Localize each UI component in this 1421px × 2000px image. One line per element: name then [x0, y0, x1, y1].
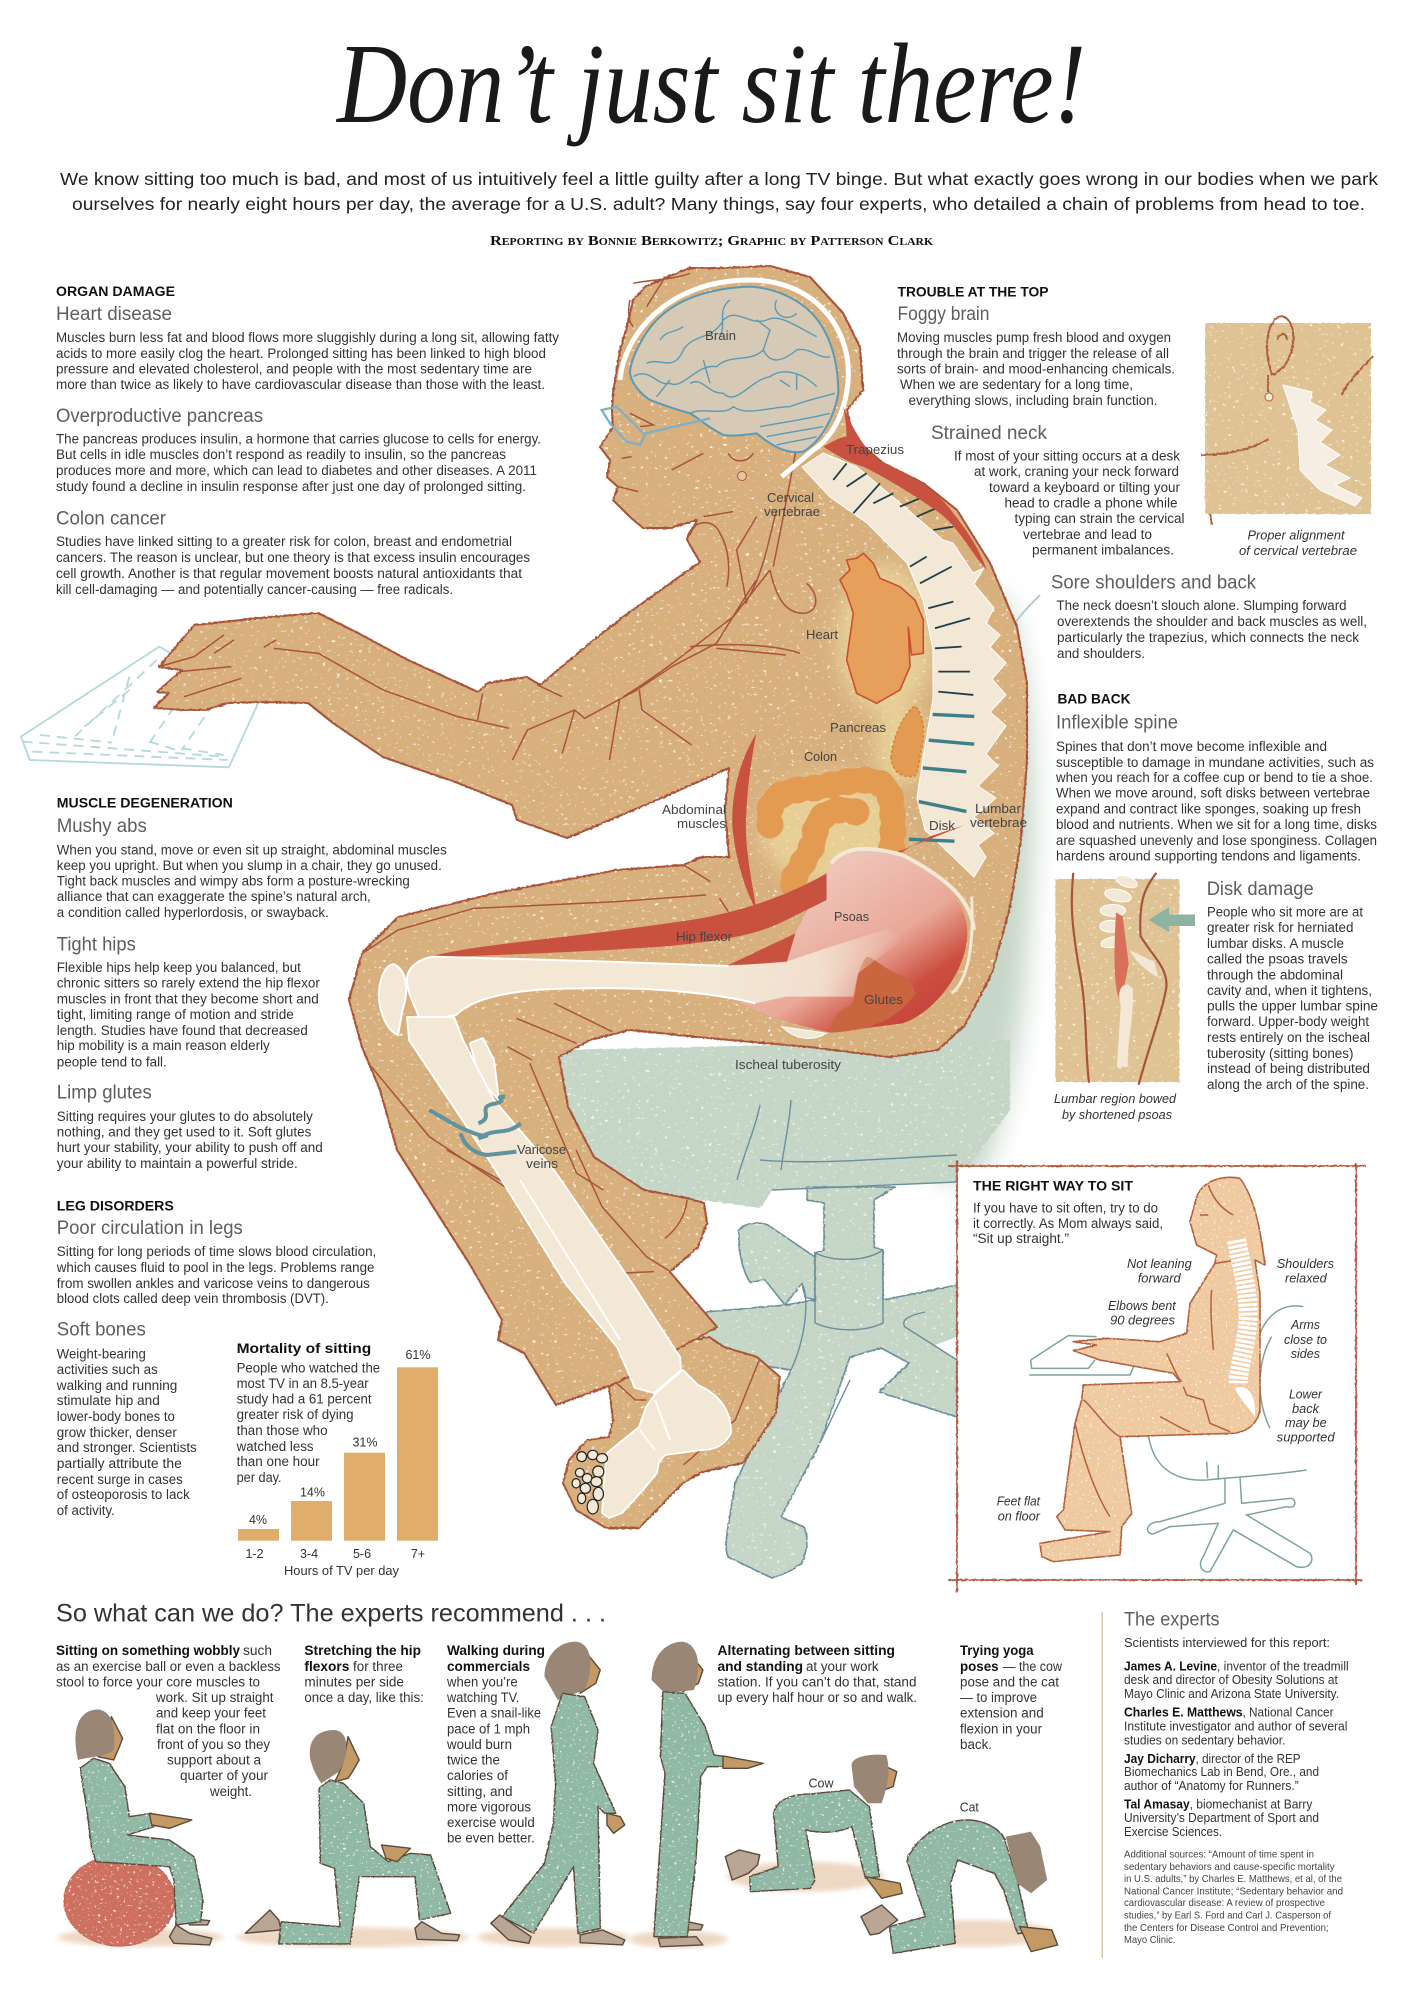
panel: sore shoulders: particularly the trapezius, which connects the neck — [1057, 630, 1359, 645]
pelvis and glutes — [379, 825, 974, 1038]
panel: bad back: blood and nutrients. When we sit for a long time, disks — [1056, 817, 1377, 832]
panel: organ damage: kill cell-damaging — and potentially cancer-causing — free radicals. — [56, 582, 453, 597]
text: stretching the hip flexors: for three — [353, 1659, 403, 1674]
right-way annotations: Elbows bent — [1108, 1298, 1177, 1313]
figure: seated body — [154, 266, 1027, 1528]
panel: trouble at the top: Moving muscles pump fresh blood and oxygen — [897, 330, 1171, 345]
right-way annotations: forward — [1138, 1271, 1181, 1286]
illustration labels: veins — [526, 1157, 558, 1171]
text: walking during commercials: Walking during — [447, 1643, 545, 1658]
panel: leg disorders: from swollen ankles and varicose veins to dangerous — [57, 1276, 370, 1291]
panel: organ damage: cancers. The reason is unclear, but one theory is that excess insulin encourages — [56, 550, 530, 565]
illustration labels — [517, 329, 1027, 1171]
panel: sore shoulders: The neck doesn’t slouch alone. Slumping forward — [1056, 598, 1346, 613]
panel: the experts: Mayo Clinic and Arizona State University. — [1124, 1687, 1339, 1701]
panel: the experts: Institute investigator and author of several — [1124, 1720, 1347, 1734]
text: sitting on something wobbly: flat on the floor in — [156, 1722, 260, 1737]
right-way annotations: back — [1292, 1401, 1320, 1416]
bar chart: mortality of sitting: than those who — [237, 1423, 328, 1438]
right-way annotations: sides — [1291, 1346, 1320, 1361]
text: stretching the hip flexors — [304, 1643, 424, 1705]
illustration labels: Lumbar — [975, 802, 1021, 816]
additional sources: cardiovascular disease: A review of prospective — [1124, 1897, 1325, 1909]
additional sources: Additional sources: “Amount of time spent in — [1124, 1849, 1314, 1861]
panel: the right way to sit — [948, 1160, 1366, 1593]
bar chart: mortality of sitting: 61% — [405, 1348, 431, 1362]
panel: muscle degeneration: tight, limiting range of motion and stride — [57, 1007, 294, 1022]
text: walking during commercials: sitting, and — [447, 1784, 513, 1799]
panel: leg disorders: lower-body bones to — [57, 1409, 175, 1424]
panel: the right way to sit: If you have to sit often, try to do — [973, 1201, 1158, 1216]
bar chart: mortality of sitting: most TV in an 8.5-year — [237, 1376, 369, 1391]
bar chart: mortality of sitting: greater risk of dying — [237, 1407, 354, 1422]
panel: trouble at the top: at work, craning your neck forward — [974, 464, 1179, 479]
panel: trouble at the top — [897, 284, 1184, 558]
neck inset caption — [1239, 528, 1357, 558]
panel: disk damage: greater risk for herniated — [1207, 920, 1354, 935]
keyboard — [21, 647, 259, 767]
shin and foot bones — [407, 1017, 731, 1518]
text: trying yoga poses: — to improve — [960, 1690, 1037, 1705]
panel: disk damage: pulls the upper lumbar spine — [1207, 999, 1378, 1014]
panel: bad back: susceptible to damage in mundane activities, such as — [1056, 755, 1374, 770]
panel: leg disorders: recent surge in cases — [57, 1472, 183, 1487]
bar chart: mortality of sitting: Mortality of sitting — [237, 1341, 371, 1356]
panel: muscle degeneration: your ability to maintain a powerful stride. — [57, 1156, 298, 1171]
panel: the right way to sit: “Sit up straight.” — [973, 1231, 1069, 1246]
panel: sore shoulders — [1051, 572, 1367, 661]
disk inset caption — [1054, 1091, 1177, 1122]
text: sitting on something wobbly: stool to force your core muscles to — [56, 1675, 260, 1690]
panel: muscle degeneration: Limp glutes — [57, 1083, 152, 1104]
panel: trouble at the top: vertebrae and lead to — [1023, 527, 1152, 542]
panel: organ damage: Muscles burn less fat and blood flows more sluggishly during a long sit, allowing fatty — [56, 330, 559, 345]
panel: bad back: Inflexible spine — [1056, 713, 1178, 734]
text: sitting on something wobbly: such — [243, 1643, 272, 1658]
text: sitting on something wobbly — [56, 1643, 281, 1799]
right-way chair — [1029, 1306, 1312, 1572]
panel: organ damage: Overproductive pancreas — [56, 406, 263, 427]
panel: the experts: Exercise Sciences. — [1124, 1825, 1222, 1839]
illustration labels: muscles — [677, 817, 726, 831]
right-way annotations: close to — [1284, 1332, 1327, 1347]
panel: bad back: Spines that don’t move become inflexible and — [1056, 739, 1327, 754]
panel: leg disorders: Soft bones — [57, 1320, 146, 1341]
panel: muscle degeneration: hurt your stability, your ability to push off and — [57, 1140, 323, 1155]
neck inset caption: Proper alignment — [1248, 528, 1346, 542]
text: sitting on something wobbly: weight. — [209, 1784, 252, 1799]
panel: leg disorders: activities such as — [57, 1362, 158, 1377]
panel: disk damage: Disk damage — [1207, 879, 1314, 900]
colon — [769, 780, 893, 885]
disk inset caption: Lumbar region bowed — [1054, 1091, 1177, 1106]
illustration labels: Hip flexor — [676, 930, 732, 944]
panel: leg disorders: Poor circulation in legs — [57, 1218, 243, 1239]
text: alternating sitting and standing: and standing — [718, 1659, 803, 1674]
panel: muscle degeneration: Mushy abs — [57, 816, 147, 837]
panel: organ damage: acids to more easily clog the heart. Prolonged sitting has been linked to high blood — [56, 346, 546, 361]
femur — [407, 928, 902, 1022]
bar chart: mortality of sitting: 1-2 — [245, 1547, 264, 1561]
panel: trouble at the top: permanent imbalances. — [1032, 542, 1174, 558]
earring — [738, 472, 746, 480]
right-way annotations: Feet flat — [997, 1494, 1041, 1509]
bar chart: mortality of sitting: watched less — [236, 1439, 314, 1454]
illustration labels: Glutes — [864, 993, 903, 1007]
arrow — [1148, 907, 1195, 932]
panel: disk damage — [1207, 879, 1378, 1092]
additional sources: Mayo Clinic. — [1124, 1934, 1176, 1946]
bar chart: mortality of sitting: 31% — [352, 1436, 378, 1450]
text: walking during commercials: twice the — [447, 1753, 500, 1768]
hip flexor — [429, 873, 827, 965]
panel: trouble at the top: Foggy brain — [898, 304, 990, 325]
additional sources: National Cancer Institute; “Sedentary behavior and — [1124, 1886, 1343, 1898]
panel: bad back — [1055, 692, 1377, 864]
text: trying yoga poses: extension and — [960, 1706, 1044, 1721]
figure stretching — [245, 1730, 460, 1944]
bar chart: mortality of sitting: than one hour — [237, 1454, 320, 1469]
panel: muscle degeneration: length. Studies have found that decreased — [57, 1023, 308, 1038]
right-way annotations: supported — [1277, 1430, 1335, 1445]
bar chart: mortality of sitting: 4% — [249, 1513, 267, 1527]
text: trying yoga poses: — the cow — [1003, 1659, 1062, 1674]
varicose veins — [429, 1097, 521, 1155]
right-way figure — [1040, 1177, 1265, 1562]
panel: muscle degeneration: nothing, and they get used to it. Soft glutes — [57, 1125, 312, 1140]
panel: leg disorders: and stronger. Scientists — [57, 1440, 197, 1455]
illustration labels: Varicose — [517, 1143, 566, 1157]
panel: the experts: author of “Anatomy for Runners.” — [1124, 1779, 1299, 1793]
panel: the experts — [1124, 1610, 1349, 1839]
panel: disk damage: tuberosity (sitting bones) — [1207, 1046, 1354, 1061]
panel: trouble at the top: everything slows, including brain function. — [908, 393, 1158, 408]
cow label: Cow — [808, 1777, 834, 1791]
illustration labels: Psoas — [834, 910, 869, 924]
text: sitting on something wobbly: Sitting on something wobbly — [56, 1643, 240, 1658]
illustration labels: Trapezius — [846, 443, 904, 457]
exercise figures: ball, stretch, walk, stand — [58, 1642, 763, 1948]
panel: muscle degeneration: keep you upright. But when you slump in a chair, they go unused. — [57, 858, 442, 873]
text: walking during commercials: would burn — [446, 1737, 512, 1752]
panel: trouble at the top: toward a keyboard or tilting your — [989, 480, 1180, 495]
text: sitting on something wobbly: as an exercise ball or even a backless — [56, 1659, 281, 1674]
organ glow — [760, 565, 933, 885]
bar chart: mortality of sitting: Hours of TV per day — [284, 1564, 400, 1578]
spine — [802, 453, 1006, 877]
panel: disk damage: lumbar disks. A muscle — [1207, 936, 1344, 951]
illustration labels: Ischeal tuberosity — [735, 1058, 842, 1072]
exercise figures: cow and cat — [725, 1755, 1058, 1953]
text: walking during commercials: pace of 1 mph — [447, 1722, 530, 1737]
text: walking during commercials: commercials — [447, 1659, 530, 1674]
panel: leg disorders: grow thicker, denser — [57, 1425, 177, 1440]
panel: muscle degeneration: hip mobility is a main reason elderly — [57, 1038, 270, 1053]
text: walking during commercials: more vigorous — [447, 1800, 531, 1815]
illustration labels: Brain — [705, 329, 736, 343]
toes — [572, 1450, 608, 1514]
panel: trouble at the top: sorts of brain- and mood-enhancing chemicals. — [897, 362, 1175, 376]
panel: the right way to sit: it correctly. As Mom always said, — [973, 1216, 1163, 1231]
byline: Reporting by Bonnie Berkowitz; Graphic by Patterson Clark — [490, 234, 933, 249]
panel: disk damage: called the psoas travels — [1207, 952, 1348, 967]
panel: organ damage: ORGAN DAMAGE — [56, 284, 175, 299]
kneecap — [379, 964, 406, 1035]
text: sitting on something wobbly: support about a — [167, 1753, 261, 1768]
panel: the experts: , director of the REP — [1196, 1752, 1301, 1766]
panel: muscle degeneration — [57, 796, 447, 1171]
panel: muscle degeneration: Tight hips — [57, 934, 136, 956]
right-way annotations: 90 degrees — [1110, 1313, 1175, 1328]
bar chart: mortality of sitting: study had a 61 percent — [237, 1392, 372, 1407]
figure standing — [652, 1642, 763, 1947]
text: alternating sitting and standing: at your work — [806, 1659, 879, 1674]
right-way annotations — [997, 1256, 1335, 1524]
panel: muscle degeneration: MUSCLE DEGENERATION — [57, 796, 233, 811]
neck inset caption: of cervical vertebrae — [1239, 543, 1357, 558]
panel: sore shoulders: Sore shoulders and back — [1051, 572, 1256, 594]
panel: muscle degeneration: When you stand, move or even sit up straight, abdominal muscles — [57, 842, 447, 858]
panel: organ damage: The pancreas produces insulin, a hormone that carries glucose to cells for energy. — [56, 432, 541, 446]
text: walking during commercials: calories of — [447, 1768, 508, 1783]
panel: leg disorders: blood clots called deep vein thrombosis (DVT). — [57, 1291, 329, 1306]
pancreas — [891, 706, 923, 777]
panel: leg disorders: partially attribute the — [57, 1456, 182, 1471]
illustration labels: Pancreas — [830, 721, 886, 735]
panel: the experts: James A. Levine — [1124, 1660, 1217, 1674]
illustration labels: Colon — [804, 750, 837, 764]
additional sources: sedentary behaviors and cause-specific mortality — [1124, 1861, 1335, 1873]
panel: muscle degeneration: people tend to fall. — [57, 1054, 167, 1070]
text: trying yoga poses: Trying yoga — [960, 1643, 1034, 1658]
figure on ball — [75, 1709, 212, 1945]
panel: disk damage: through the abdominal — [1207, 967, 1343, 982]
panel: organ damage: Colon cancer — [56, 508, 167, 530]
panel: bad back: BAD BACK — [1058, 692, 1131, 706]
panel: disk damage: rests entirely on the ischeal — [1207, 1030, 1370, 1045]
panel: trouble at the top: through the brain and trigger the release of all — [897, 346, 1169, 361]
intro text — [60, 169, 1378, 214]
panel: disk damage: cavity and, when it tightens, — [1207, 983, 1372, 998]
text: walking during commercials: be even better. — [447, 1831, 535, 1846]
text: stretching the hip flexors: Stretching the hip — [304, 1643, 421, 1658]
bar chart: mortality of sitting: 5-6 — [353, 1547, 371, 1561]
panel: the experts: Jay Dicharry — [1124, 1752, 1196, 1766]
text: trying yoga poses: back. — [960, 1737, 992, 1752]
panel: leg disorders: stimulate hip and — [57, 1393, 160, 1408]
right-way annotations: Shoulders — [1277, 1256, 1334, 1271]
trapezius muscle — [823, 407, 987, 570]
additional sources: in U.S. adults,” by Charles E. Matthews, et al, of the — [1124, 1873, 1342, 1885]
panel: the experts: Biomechanics Lab in Bend, Ore., and — [1124, 1765, 1319, 1779]
illustration labels: Heart — [806, 628, 839, 642]
figure walking — [491, 1642, 625, 1945]
panel: trouble at the top: If most of your sitting occurs at a desk — [954, 448, 1180, 464]
panel: disk damage: along the arch of the spine. — [1207, 1077, 1369, 1092]
glasses — [602, 407, 710, 445]
text: walking during commercials: Even a snail-like — [447, 1706, 541, 1721]
panel: bad back: expand and contract like sponges, soaking up fresh — [1056, 802, 1361, 816]
clothing and skin lines — [159, 273, 816, 1465]
panel: the experts: , National Cancer — [1242, 1706, 1334, 1720]
panel: leg disorders: walking and running — [56, 1378, 177, 1393]
panel: leg disorders: Sitting for long periods of time slows blood circulation, — [57, 1244, 376, 1259]
bar chart: mortality of sitting: 14% — [300, 1486, 325, 1500]
panel: organ damage: pressure and elevated cholesterol, and people with the most sedentary time are — [56, 362, 532, 376]
panel: the experts: Scientists interviewed for this report: — [1124, 1636, 1330, 1650]
text: walking during commercials — [446, 1643, 545, 1846]
panel: the experts: University’s Department of Sport and — [1124, 1811, 1319, 1825]
panel: bad back: When we move around, soft disks between vertebrae — [1056, 786, 1370, 801]
text: stretching the hip flexors: flexors — [304, 1659, 349, 1674]
illustration labels: vertebrae — [970, 816, 1027, 830]
bar chart: mortality of sitting — [236, 1341, 438, 1578]
panel: trouble at the top: TROUBLE AT THE TOP — [898, 284, 1048, 300]
disk inset caption: by shortened psoas — [1062, 1107, 1172, 1122]
panel: organ damage: study found a decline in insulin response after just one day of prolonged sitting. — [56, 479, 526, 494]
panel: trouble at the top: head to cradle a phone while — [1004, 496, 1178, 510]
text: walking during commercials: exercise would — [447, 1815, 535, 1830]
panel: leg disorders: Weight-bearing — [57, 1347, 146, 1362]
panel: leg disorders: which causes fluid to pool in the legs. Problems range — [56, 1260, 374, 1275]
panel: the experts: The experts — [1124, 1610, 1220, 1631]
additional sources: studies,” by Earl S. Ford and Carl J. Casperson of — [1124, 1910, 1331, 1922]
panel: the experts: Charles E. Matthews — [1124, 1706, 1243, 1720]
text: alternating sitting and standing: station. If you can’t do that, stand — [718, 1675, 916, 1690]
text: sitting on something wobbly: front of you so they — [157, 1737, 270, 1752]
cow pose — [725, 1755, 902, 1898]
text: trying yoga poses: pose and the cat — [960, 1675, 1059, 1690]
additional sources — [1124, 1849, 1343, 1946]
panel: muscle degeneration: Sitting requires your glutes to do absolutely — [57, 1109, 313, 1124]
panel: bad back: when you reach for a coffee cup or bend to tie a shoe. — [1055, 770, 1373, 785]
cat label: Cat — [960, 1801, 979, 1815]
text: sitting on something wobbly: and keep your feet — [156, 1706, 266, 1721]
illustration labels: Abdominal — [662, 803, 726, 817]
panel: muscle degeneration: Flexible hips help keep you balanced, but — [57, 960, 301, 975]
panel: organ damage: Studies have linked sitting to a greater risk for colon, breast and endometrial — [56, 534, 512, 549]
panel: muscle degeneration: Tight back muscles and wimpy abs form a posture-wrecking — [57, 874, 410, 889]
right-way annotations: Arms — [1290, 1317, 1320, 1332]
bar chart: mortality of sitting: 7+ — [411, 1547, 425, 1561]
abdominal muscle — [732, 733, 756, 910]
panel: organ damage: produces more and more, which can lead to diabetes and other diseases. A 2011 — [56, 463, 537, 478]
panel: the experts: , biomechanist at Barry — [1190, 1798, 1313, 1812]
text: walking during commercials: watching TV. — [446, 1690, 520, 1705]
text: stretching the hip flexors: minutes per side — [304, 1675, 404, 1690]
panel: organ damage: But cells in idle muscles don’t respond as readily to insulin, so the pancreas — [56, 447, 506, 462]
panel: disk inset — [1055, 873, 1179, 1085]
panel: leg disorders: of activity. — [57, 1503, 115, 1518]
illustration labels: Cervical — [767, 491, 814, 505]
panel: trouble at the top: typing can strain the cervical — [1014, 511, 1184, 526]
panel: sore shoulders: overextends the shoulder and back muscles as well, — [1057, 614, 1367, 629]
panel: sore shoulders: and shoulders. — [1057, 646, 1145, 661]
illustration labels: Disk — [929, 819, 956, 833]
right-way annotations: on floor — [998, 1509, 1041, 1524]
title: Don’t just sit there! — [335, 20, 1086, 147]
panel: disk damage: instead of being distributed — [1207, 1061, 1370, 1076]
intro text: We know sitting too much is bad, and most of us intuitively feel a little guilty after a long TV binge. But what exactly goes wrong in our bodies when we park — [60, 169, 1378, 189]
brain — [620, 280, 848, 477]
intro text: ourselves for nearly eight hours per day, the average for a U.S. adult? Many things, say four experts, who detailed a chain of problems from head to toe. — [72, 194, 1365, 214]
text: stretching the hip flexors: once a day, like this: — [304, 1690, 424, 1705]
heading: recommendations: So what can we do? The experts recommend . . . — [56, 1600, 606, 1628]
text: sitting on something wobbly: quarter of your — [180, 1768, 269, 1783]
text: alternating sitting and standing: up every half hour or so and walk. — [718, 1690, 917, 1705]
panel: organ damage: cell growth. Another is that regular movement boosts natural antioxidants that — [56, 566, 522, 581]
right-way annotations: may be — [1285, 1415, 1327, 1430]
bar chart: mortality of sitting: per day. — [237, 1470, 282, 1485]
panel: the experts: studies on sedentary behavior. — [1124, 1734, 1285, 1748]
panel: the right way to sit: THE RIGHT WAY TO SIT — [973, 1179, 1134, 1194]
text: trying yoga poses — [960, 1643, 1062, 1752]
panel: muscle degeneration: alliance that can exaggerate the spine’s natural arch, — [57, 889, 371, 904]
right-way annotations: relaxed — [1285, 1271, 1327, 1286]
panel: the experts: , inventor of the treadmill — [1217, 1660, 1349, 1674]
text: sitting on something wobbly: work. Sit up straight — [155, 1690, 274, 1705]
panel: leg disorders: of osteoporosis to lack — [57, 1487, 190, 1502]
panel: muscle degeneration: chronic sitters so rarely extend the hip flexor — [57, 976, 320, 990]
panel: the experts: Tal Amasay — [1124, 1798, 1190, 1812]
panel: trouble at the top: Strained neck — [931, 423, 1047, 444]
panel: disk damage: forward. Upper-body weight — [1207, 1014, 1369, 1029]
right-way annotations: Lower — [1289, 1387, 1323, 1402]
panel: bad back: are squashed unevenly and lose sponginess. Collagen — [1056, 833, 1377, 848]
divider — [1102, 1612, 1103, 1958]
additional sources: the Centers for Disease Control and Prevention; — [1124, 1922, 1329, 1934]
text: trying yoga poses: flexion in your — [960, 1722, 1042, 1737]
text: walking during commercials: when you’re — [446, 1675, 518, 1690]
text: trying yoga poses: poses — [960, 1659, 999, 1674]
bar chart: mortality of sitting: People who watched the — [237, 1361, 380, 1376]
text: alternating sitting and standing — [718, 1643, 917, 1705]
panel: muscle degeneration: muscles in front that they become short and — [57, 992, 319, 1007]
exercise ball — [64, 1855, 175, 1946]
heart — [840, 553, 923, 703]
panel: leg disorders: LEG DISORDERS — [57, 1199, 174, 1214]
panel: organ damage — [56, 284, 559, 597]
panel: the experts: desk and director of Obesity Solutions at — [1124, 1673, 1338, 1687]
panel: muscle degeneration: a condition called hyperlordosis, or swayback. — [57, 905, 329, 920]
panel: bad back: hardens around supporting tendons and ligaments. — [1056, 849, 1361, 864]
panel: organ damage: more than twice as likely to have cardiovascular disease than those with the least. — [56, 377, 545, 392]
bar chart: mortality of sitting: 3-4 — [300, 1547, 318, 1561]
panel: leg disorders — [56, 1199, 376, 1518]
chair illustration — [556, 590, 1040, 1578]
illustration labels: vertebrae — [764, 505, 820, 519]
panel: organ damage: Heart disease — [56, 304, 172, 325]
panel: disk damage: People who sit more are at — [1207, 904, 1363, 919]
text: alternating sitting and standing: Alternating between sitting — [718, 1643, 895, 1658]
right-way annotations: Not leaning — [1127, 1256, 1192, 1271]
panel: trouble at the top: When we are sedentary for a long time, — [900, 377, 1133, 392]
panel: neck inset — [1201, 316, 1373, 525]
cat pose — [861, 1820, 1058, 1953]
